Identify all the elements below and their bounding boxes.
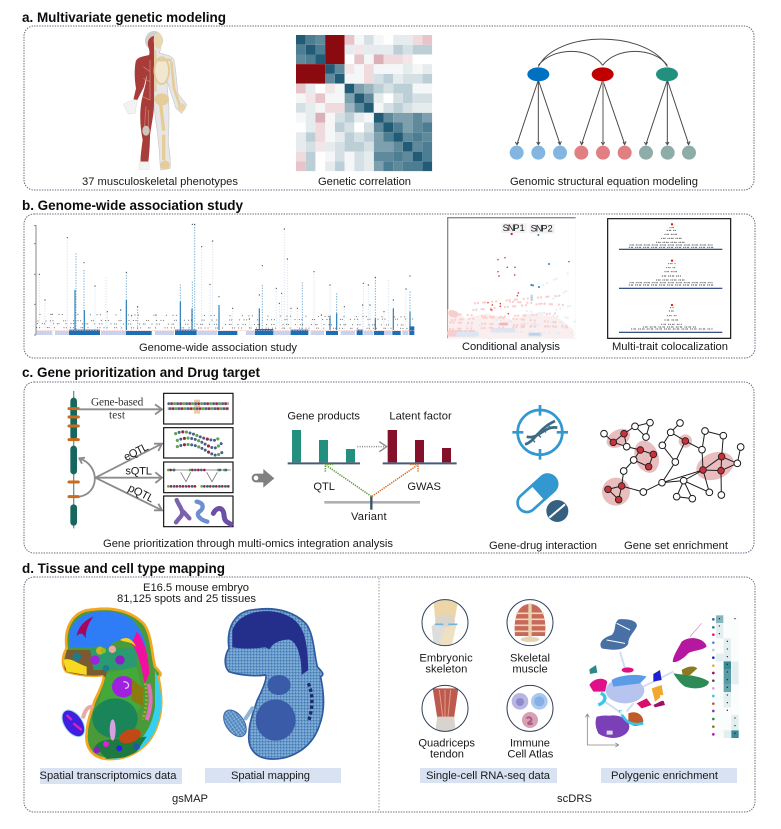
label: quadriceps tendon: tendon bbox=[430, 749, 464, 761]
text: embryo description bbox=[117, 582, 256, 605]
chart: Manhattan plot bbox=[34, 224, 414, 335]
label: latent factor: Latent factor bbox=[389, 411, 452, 423]
label: immune cell atlas bbox=[507, 738, 554, 761]
box: pQTL proteins bbox=[164, 496, 233, 527]
label: GWAS: GWAS bbox=[407, 481, 441, 493]
label: sQTL: sQTL bbox=[125, 466, 152, 478]
label: gene-based test bbox=[91, 396, 144, 421]
box: gene-based beads bbox=[164, 393, 233, 424]
panel b: genome-wide association study bbox=[24, 214, 755, 358]
label: embryonic skeleton: skeleton bbox=[425, 664, 467, 676]
label: SNP 1: SNP 1 bbox=[503, 223, 525, 233]
label: quadriceps tendon bbox=[418, 738, 475, 761]
group: single-cell atlases bbox=[418, 598, 554, 761]
arrow: key-shaped process arrow bbox=[252, 469, 274, 488]
chart: gene products and latent factor bars bbox=[287, 411, 457, 523]
label: quadriceps tendon: Quadriceps bbox=[418, 738, 475, 750]
label: genetic correlation: Genetic correlation bbox=[318, 176, 411, 188]
image: spatial mapping embryo bbox=[219, 609, 324, 759]
panel a: multivariate genetic modeling bbox=[24, 26, 754, 190]
caption: polygenic enrichment: Polygenic enrichment bbox=[611, 770, 719, 782]
label: gene-based test: test bbox=[109, 409, 126, 421]
chart: conditional analysis scatter bbox=[448, 218, 576, 338]
icon: immune cells bbox=[507, 685, 553, 731]
icon: drug capsule and tablet bbox=[513, 469, 568, 522]
heading c: c. Gene prioritization and Drug target bbox=[22, 365, 260, 380]
icon: quadriceps tendon bbox=[422, 685, 468, 733]
text: embryo description: E16.5 mouse embryo bbox=[143, 582, 249, 594]
label: gene prioritization through multi-omics integration analysis: Gene prioritization through multi-omics integration analysis bbox=[103, 538, 393, 550]
caption: polygenic enrichment bbox=[601, 768, 737, 783]
caption: spatial mapping: Spatial mapping bbox=[231, 770, 310, 782]
chart: UMAP clusters bbox=[585, 619, 709, 747]
label: genomic structural equation modeling: Genomic structural equation modeling bbox=[510, 176, 698, 188]
caption: spatial transcriptomics data: Spatial transcriptomics data bbox=[40, 770, 177, 782]
arrows: QTL links bbox=[78, 404, 162, 510]
label: skeletal muscle: muscle bbox=[512, 664, 548, 676]
image: spatial transcriptomics embryo bbox=[57, 609, 161, 760]
label: gene-drug interaction: Gene-drug interaction bbox=[489, 540, 597, 552]
label: gsMAP: gsMAP bbox=[172, 793, 208, 805]
label: immune cell atlas: Cell Atlas bbox=[507, 749, 554, 761]
label: gene-based test: Gene-based bbox=[91, 396, 144, 408]
label: multi-trait colocalization: Multi-trait colocalization bbox=[612, 341, 728, 353]
label: gene set enrichment: Gene set enrichment bbox=[624, 540, 729, 552]
panel c: gene prioritization and drug target bbox=[24, 382, 754, 553]
label: embryonic skeleton: Embryonic bbox=[419, 653, 473, 665]
label: SNP 2: SNP 2 bbox=[531, 224, 553, 234]
box: eQTL beads bbox=[164, 428, 233, 458]
icon: chromosome bbox=[69, 391, 78, 528]
box: sQTL splicing beads bbox=[164, 462, 233, 493]
heading b: b. Genome-wide association study bbox=[22, 198, 243, 213]
chart: genomic SEM path diagram bbox=[510, 39, 696, 160]
label: skeletal muscle bbox=[510, 653, 550, 676]
text: embryo description: 81,125 spots and 25 tissues bbox=[117, 593, 256, 605]
chart: multi-trait colocalization bbox=[608, 219, 731, 338]
icon: DNA target bbox=[512, 405, 568, 460]
label: scDRS: scDRS bbox=[557, 793, 592, 805]
icon: human body anatomy bbox=[123, 31, 187, 170]
label: gene products: Gene products bbox=[287, 411, 360, 423]
caption: spatial mapping bbox=[205, 768, 341, 783]
label: variant: Variant bbox=[351, 511, 388, 523]
icon: skeletal muscle ribcage bbox=[507, 600, 553, 646]
icon: embryonic skeleton knee bbox=[422, 598, 468, 647]
label: QTL: QTL bbox=[313, 481, 335, 493]
label: immune cell atlas: Immune bbox=[510, 738, 550, 750]
label: embryonic skeleton bbox=[419, 653, 473, 676]
label: genome-wide association study: Genome-wide association study bbox=[139, 342, 297, 354]
label: skeletal muscle: Skeletal bbox=[510, 653, 550, 665]
caption: single-cell RNA-seq data: Single-cell RNA-seq data bbox=[426, 770, 551, 782]
label: eQTL: eQTL bbox=[122, 441, 151, 464]
label: conditional analysis: Conditional analysis bbox=[462, 341, 560, 353]
label: 37 musculoskeletal phenotypes: 37 musculoskeletal phenotypes bbox=[82, 176, 238, 188]
network: gene set enrichment bbox=[601, 419, 744, 506]
chart: polygenic enrichment dot-heat strip bbox=[713, 615, 739, 738]
heading d: d. Tissue and cell type mapping bbox=[22, 561, 225, 576]
label: pQTL: pQTL bbox=[126, 482, 156, 505]
heatmap: genetic correlation bbox=[296, 35, 432, 171]
panel d: tissue and cell type mapping bbox=[24, 577, 755, 812]
diagram: multi-omics inputs bbox=[69, 391, 233, 528]
heading a: a. Multivariate genetic modeling bbox=[22, 10, 226, 25]
